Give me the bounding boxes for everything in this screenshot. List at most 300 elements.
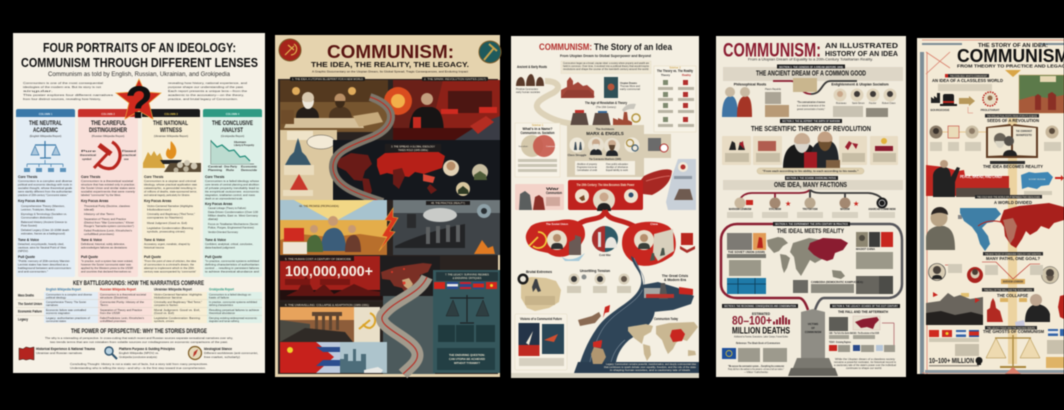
section 3: one idea, many factions: ★ <box>853 200 859 208</box>
panel: revolution scene <box>384 80 500 140</box>
legacy text band: Legacy: Communism remains powerful, transformative, and deeply controversial idea <box>606 363 697 366</box>
column 2: the careful distinguisher: Theoretical Purity (Doctrine, classless <box>84 204 131 208</box>
icon: red star with question mark <box>116 77 161 128</box>
column 2: the careful distinguisher: Pull Quote <box>81 255 98 259</box>
column 4: the conclusive analyst: Million deaths, East vs. West Germany <box>208 214 259 218</box>
panel: visions of a communist future <box>515 314 567 370</box>
section 6: fall and aftermath: 1991 - The Dissolution of the USSR <box>853 331 879 335</box>
column 4: the conclusive analyst: Core Thesis <box>205 175 225 179</box>
poster 5 title: FROM THEORY TO PRACTICE AND LEGACY <box>957 64 1064 68</box>
section: a world divided <box>926 195 1064 251</box>
arrow: lightning divider <box>379 208 398 251</box>
column 4: the conclusive analyst: Verdict-Oriented Summary <box>208 230 239 234</box>
icon: wheat, flame and skulls <box>143 141 201 172</box>
column 3: the national witness: symbols, prosecuting crimes) <box>147 230 185 234</box>
column 3: the national witness: Key Focus Areas <box>144 199 172 203</box>
column 3: the national witness: Legislative Condemnation (Banning <box>147 226 194 230</box>
column 2: the careful distinguisher: Failed Predictions (Lenin, Khrushchev's <box>84 228 133 232</box>
column 2: the careful distinguisher: Key Focus Areas <box>81 199 109 203</box>
column 2: the careful distinguisher: however the Soviet 'communist state' was <box>81 262 132 266</box>
column 4: the conclusive analyst: Police, Purges, Engineered Famines) <box>208 226 254 230</box>
panel: China red cloud <box>622 222 676 266</box>
key battlegrounds comparison table: Resulting perpetual failures to achieve <box>209 308 260 312</box>
Enlightenment portraits: Robert Owen <box>882 102 896 105</box>
poster 1 intro text <box>23 81 248 101</box>
column 1: the neutral academic: political and economic ideology with roots in <box>18 182 73 186</box>
section 1: ancient dream: SECTION 1: THE GENESIS OF A DREAM (BEFORE 1848) <box>779 65 843 69</box>
section labels: TAKES HOLD (1945-1980s) <box>398 149 428 152</box>
column 1: the neutral academic: Communism is a complex and diverse <box>18 179 73 183</box>
column 2: the careful distinguisher: unfulfilled promises) <box>84 232 114 236</box>
power of perspective section <box>19 329 258 370</box>
key battlegrounds comparison table: communist states <box>46 319 67 323</box>
column 3: the national witness: catastrophic, a genocidal resulting in <box>144 186 197 190</box>
poster 1: four portraits of an ideology <box>13 33 265 373</box>
section: the idea becomes reality: THE IDEA BECOMES REALITY <box>983 164 1043 169</box>
column 4: the conclusive analyst: Economic <box>241 164 258 168</box>
panel: the great crisis and modern era <box>642 274 694 312</box>
section 4: the ideal meets reality <box>721 222 902 310</box>
red swoosh flow <box>637 169 672 195</box>
intro text box <box>561 61 651 74</box>
section: an idea of a classless world <box>931 74 1064 113</box>
Cambodia block <box>793 280 864 293</box>
column 4: the conclusive analyst: defining characteristics of authoritarian <box>205 262 260 266</box>
flags row <box>929 329 1064 337</box>
column 2: the careful distinguisher: theoretical <box>80 153 96 157</box>
section: a world divided: THE COLD WAR: THE WORLD SPLIT BETWEEN TWO IDEOLOGIES <box>977 196 1040 199</box>
power of perspective section: THE POWER OF PERSPECTIVE: WHY THE STORIES DIVERGE <box>71 329 207 335</box>
key battlegrounds comparison table: unfulfilled promises <box>100 319 127 323</box>
section 3: one idea, many factions <box>723 176 903 218</box>
poster 3 title <box>539 42 673 58</box>
section: seeds of a revolution: MANIFESTO <box>1016 133 1032 137</box>
key battlegrounds comparison table: The Soviet Union <box>18 302 42 306</box>
poster 1 subtitle: Communism as told by English, Russian, Ukrainian, and Grokipedia <box>48 71 230 78</box>
column 3: the national witness: COLUMN 3 <box>164 112 178 116</box>
Enlightenment portraits: Saint-Simon <box>852 102 865 105</box>
column 3: the national witness: compares to Nazism) <box>147 216 183 220</box>
key battlegrounds comparison table: KEY BATTLEGROUNDS: HOW THE NARRATIVES COMPARE <box>73 281 204 287</box>
section 1: ancient dream: THE ANCIENT DREAM OF A COMMON GOOD <box>756 68 866 78</box>
icon: magnifying glass <box>105 347 117 359</box>
key battlegrounds comparison table: structure (Doctrine) <box>100 296 128 300</box>
section 5: death toll: MILLION DEATHS <box>732 326 790 336</box>
column 2: the careful distinguisher: Definitional, historical, subtly defensive, <box>81 242 125 246</box>
key battlegrounds comparison table: political ideology <box>46 296 67 300</box>
panel: the idea sepia scene <box>280 80 388 132</box>
column 1: the neutral academic: THE NEUTRAL <box>29 121 62 127</box>
key battlegrounds comparison table: Grokipedia Report <box>209 288 235 292</box>
section labels: 1. THE IDEA: A UTOPIAN BLUEPRINT FOR A NEW WORLD <box>292 78 363 81</box>
column 1: the neutral academic: (NPOV) <box>18 249 28 253</box>
column 3: the national witness: Accusatory, urgent, moralistic, shaped by <box>144 242 191 246</box>
power of perspective section: English Wikipedia (NPOV) vs. <box>119 351 159 355</box>
emblem: hammer and sickle <box>279 39 301 61</box>
column 2: the careful distinguisher: Pure <box>81 149 97 153</box>
section 4: the ideal meets reality: SECTION 4: THE EXPERIMENT: THE 20TH CENTURY IN PRACTICE <box>775 222 848 226</box>
column 1: the neutral academic: and anti-communism." <box>18 270 48 274</box>
column 4: the conclusive analyst: ANALYST <box>222 128 243 134</box>
panel: the architects Marx & Engels: Centralisation of credit <box>577 168 597 172</box>
poster 1 intro text: This poster explores four different narratives <box>23 93 114 97</box>
poster 1 intro text: from four distinct sources, revealing how history, <box>23 97 101 101</box>
arrow: red right <box>1055 175 1064 181</box>
column 3: the national witness: Communism is a utopian and criminal <box>144 179 196 183</box>
sidebar: the theory vs the reality: The Theory vs. The Reality <box>657 69 693 73</box>
key battlegrounds comparison table: Legacy: authoritarian practices of <box>46 316 90 320</box>
decorative frame <box>922 40 1064 374</box>
power of perspective section: Understanding who is telling the story—and why—is the first step toward true comprehension. <box>70 366 206 370</box>
column 4: the conclusive analyst: Confident, analytical, critical, conclusive, <box>205 242 253 246</box>
panel: Soviet Union red cloud <box>526 220 585 261</box>
illustration: medieval town and book: early communal <box>620 87 640 91</box>
key battlegrounds comparison table: basis of failure <box>209 296 230 300</box>
sidebar: the theory vs the reality: Theory <box>661 73 670 77</box>
column 4: the conclusive analyst: Focus on Totalitarian Mechanisms (Secret <box>208 222 258 226</box>
column 2: the careful distinguisher: Rouge's "barracks-system communism") <box>84 224 134 228</box>
icon: red book stack <box>680 233 695 253</box>
column 4: the conclusive analyst: "In practice, communist systems exhibited <box>205 259 260 263</box>
key battlegrounds comparison table: Separation of Theory and Practice <box>100 308 143 312</box>
power of perspective section: free-market, scholarly) <box>204 355 240 359</box>
column 2: the careful distinguisher: structure that has existed only in practice; <box>81 182 135 186</box>
poster 1 title <box>21 40 258 70</box>
column 2: the careful distinguisher: acknowledges failures as deviations <box>81 246 128 250</box>
key battlegrounds comparison table: Holodomor famine <box>154 296 183 300</box>
ancient and early roots <box>516 65 547 94</box>
sidebar: the theory vs the reality: Reality <box>682 73 691 77</box>
section: a world divided: A WORLD DIVIDED <box>994 200 1032 206</box>
column 2: the careful distinguisher: use <box>124 158 129 161</box>
column 1: the neutral academic: Pull Quote <box>18 255 35 259</box>
poster 4 title: AN ILLUSTRATED <box>825 41 899 50</box>
column 3: the national witness <box>142 109 201 277</box>
icon: red star with question mark: ? <box>125 77 153 128</box>
section 1: ancient dream: Enlightenment & Utopian Socialism <box>831 82 889 86</box>
panel: the unravelling collapse: 6. THE UNRAVELLING: COLLAPSE & ADAPTATION (1989-1991) <box>285 304 369 307</box>
poster 4: an illustrated history of an idea <box>716 36 906 377</box>
column 4: the conclusive analyst: core tenets of central planning and abolition <box>205 182 260 186</box>
column 3: the national witness: Pull Quote <box>144 255 161 259</box>
icon: declining line chart: Human <box>234 140 246 144</box>
column 3: the national witness: "From the point of view of criticism, the idea <box>144 259 197 263</box>
column 2: the careful distinguisher: Tone & Voice <box>81 238 102 242</box>
poster 1 intro text: singular. <box>23 89 54 93</box>
Enlightenment portraits <box>833 88 896 117</box>
panel: brutal extremes beige blob <box>518 270 561 311</box>
power of perspective section: The why is a misreading of perspective. In cross-cutting that watch recent and Russian sources separate sensational narratives over why, <box>45 336 233 340</box>
column 1: the neutral academic: Communalism distinction) <box>21 216 53 220</box>
panel: dark map of Asia <box>380 256 440 296</box>
section 5: death toll: Party did from the earliest to the present—crimes of all our nation." <box>728 367 784 371</box>
column 1: the neutral academic: Core Thesis <box>18 175 38 179</box>
section 5: death toll <box>722 304 798 374</box>
column 1: the neutral academic: Tone & Voice <box>18 238 39 242</box>
panel: the great crisis and modern era: The Great Crisis <box>662 274 688 278</box>
key battlegrounds comparison table: Communism is a theoretical societal <box>100 292 146 296</box>
column 2: the careful distinguisher: COLUMN 2 <box>101 112 115 116</box>
section 2: the scientific theory of revolution: SECTION 2: THE BLUEPRINT: THE BIRTH OF MARXISM <box>782 119 840 123</box>
column 4: the conclusive analyst: THE CONCLUSIVE <box>212 121 253 127</box>
panel: visions of a communist future: Visions of a Communist Future <box>520 317 562 321</box>
column 2: the careful distinguisher: THE CAREFUL <box>91 121 126 127</box>
panel: what's in a name: What's in a Name? <box>522 127 552 131</box>
road: beige idea path <box>537 81 585 126</box>
key battlegrounds comparison table: theoretical abundance <box>209 311 235 315</box>
column 4: the conclusive analyst: Communism is a failed ideology whose <box>205 179 260 183</box>
icon: compass <box>188 346 202 360</box>
section 3: one idea, many factions: ONE IDEA, MANY FACTIONS <box>774 180 847 189</box>
poster 3: the story of an idea <box>511 36 699 378</box>
column 3: the national witness: Criminality and Illegitimacy ("Red Terror," <box>147 212 195 216</box>
section 5: death toll: —Viktor Yushchenko <box>744 370 768 374</box>
panel: brutal extremes beige blob: Brutal Extremes <box>526 270 552 274</box>
key battlegrounds comparison table: Communist Purity: History of the <box>100 300 145 304</box>
column 4: the conclusive analyst: of private property inevitably lead to <box>205 186 260 190</box>
poster 4 title: HISTORY OF AN IDEA <box>825 49 899 58</box>
tan center strip <box>1008 118 1017 364</box>
quote pill <box>757 168 864 174</box>
section: many paths, one goal: MANY PATHS, ONE GOAL? <box>986 256 1040 262</box>
power of perspective section: Historical Experience & National Trauma <box>36 347 95 351</box>
age of revolution & theory <box>570 101 640 127</box>
monument: victims of communism: COMMUNISM <box>805 330 821 334</box>
column 2: the careful distinguisher: Communism is a theoretical societal <box>81 179 133 183</box>
blue map of Soviet Russia: SOVIET RUSSIA <box>1029 178 1046 181</box>
section: the collapse <box>926 288 1064 328</box>
panel: what's in a name: Communism vs. Socialism <box>520 131 554 135</box>
key battlegrounds comparison table: (Good vs. Evil) <box>154 311 174 315</box>
panel: the communist manifesto grey box <box>666 159 696 210</box>
column 1: the neutral academic: Post-Soviet) <box>21 224 37 228</box>
sidebar: the theory vs the reality <box>654 66 696 132</box>
section: an idea of a classless world: BOURGEOISIE <box>931 108 950 112</box>
ancient and early roots: Ancient & Early Roots <box>517 65 547 69</box>
panel: the promise propaganda: 4A. THE PROMISE (PROPAGANDA) <box>299 205 339 208</box>
column 4: the conclusive analyst: Democide <box>241 168 258 172</box>
column 4: the conclusive analyst: control ... resulting in persistent failures <box>205 266 260 270</box>
column 2: the careful distinguisher: socialist experiments that were merely <box>81 190 136 194</box>
key battlegrounds comparison table: narratives <box>46 303 59 307</box>
panel: the unravelling collapse <box>280 302 383 342</box>
panel: the architects Marx & Engels: Free public education <box>606 162 628 166</box>
column 2: the careful distinguisher: symbol <box>82 157 92 161</box>
key battlegrounds comparison table: Moral Judgment: Good vs. Evil, <box>154 308 200 312</box>
section: many paths, one goal: MARXISM-LENINISM <box>1003 280 1024 284</box>
Enlightenment portraits: Fourier <box>869 102 877 105</box>
panel: legacy teal section with flags and scales: CAN UTOPIA BE ACHIEVED <box>449 357 486 361</box>
key battlegrounds comparison table: Comprehensive Theory: The Soviet <box>46 300 86 304</box>
key battlegrounds comparison table: compares to Nazism <box>154 303 179 307</box>
column 4: the conclusive analyst: Data-Driven Condemnation (Over 100 <box>208 210 259 214</box>
age of revolution & theory: The Age of Revolution & Theory <box>585 101 627 105</box>
key battlegrounds comparison table: Communism is a complex and diverse <box>46 292 93 296</box>
section 2: the scientific theory of revolution <box>722 119 898 174</box>
photos: People's Republic of China: MAOIST CHINA <box>856 247 875 251</box>
column 1: the neutral academic: "Public memory of 20th-century Marxist- <box>18 259 70 263</box>
column 4: the conclusive analyst: to achieve theoretical abundance and <box>205 270 260 274</box>
column 3: the national witness: attempt to implement which in the 20th <box>144 266 195 270</box>
column 1: the neutral academic: Balanced History (Ancient Greece to <box>21 220 68 224</box>
key battlegrounds comparison table: English Wikipedia Report <box>46 288 82 292</box>
section 2: the scientific theory of revolution: THE SCIENTIFIC THEORY OF REVOLUTION <box>751 124 871 133</box>
panel: what's in a name: Communism <box>546 146 558 148</box>
column 3: the national witness: (Ukrainian Wikipedia Report) <box>154 134 188 138</box>
panel: new communism pink callout <box>515 184 564 210</box>
unsettling tension portraits <box>567 269 631 293</box>
revolution scene: PEACE, BREAD, AND LAND! <box>960 174 1002 179</box>
key battlegrounds comparison table: Criminality and Illegitimacy "Red Terror," <box>154 300 202 304</box>
poster 1 intro text: practice, and brutal legacy of Communism. <box>168 97 238 101</box>
column 3: the national witness: historical trauma <box>144 246 165 250</box>
legacy text band: in shaping human societies, and a cautionary tale of ideals <box>610 369 691 372</box>
section: the ghosts of communism <box>929 326 1064 368</box>
column 1: the neutral academic: Detached, encyclopedic, heavily cited, <box>18 242 64 246</box>
section 6: fall and aftermath: SECTION 6: THE LEGACY: ECHOES OF THE 21ST CENTURY <box>832 304 898 308</box>
column 3: the national witness: WITNESS <box>160 128 182 134</box>
column 1: the neutral academic: battleground between anti-communism <box>18 266 72 270</box>
monument: victims of communism: OF <box>811 326 815 330</box>
intro text box: revolutions and shape the course of the twentieth century around the world. <box>563 67 649 71</box>
poster 1 intro text: ideologies of the modern era. But its story is not <box>23 85 101 89</box>
column 2: the careful distinguisher: Flawed <box>122 149 137 153</box>
panel: China red cloud: China <box>650 222 658 226</box>
icon: skull <box>976 357 982 365</box>
panel: the architects Marx & Engels: The Architects <box>596 127 615 131</box>
poster 5 title: THE STORY OF AN IDEA: <box>978 43 1048 49</box>
column 3: the national witness: THE NATIONAL <box>153 121 188 127</box>
column 1: the neutral academic: cautious; aims for Neutral Point of View <box>18 246 66 250</box>
section 5: death toll: Attributed to Famine, Executions, Labor Camps, Forced Exiles <box>734 334 788 338</box>
panel: the architects Marx & Engels: Class Struggle <box>568 153 587 157</box>
column 4: the conclusive analyst: data) <box>208 217 218 221</box>
section 1: ancient dream: Plato's Republic <box>765 87 782 91</box>
poster 2 title <box>275 35 500 79</box>
ancient and early roots: Primitive Communism <box>516 87 539 91</box>
column 2: the careful distinguisher: (Russian Wikipedia Report) <box>92 134 124 138</box>
section: seeds of a revolution: THE COMMUNIST <box>1016 129 1032 133</box>
key battlegrounds comparison table: stagnation and human suffering <box>209 319 239 323</box>
column 2: the careful distinguisher: DISTINGUISHER <box>89 128 128 134</box>
key battlegrounds comparison table: symbols, crimes <box>154 319 175 323</box>
power of perspective section: Ukrainian and Russian narratives <box>36 351 83 355</box>
panel: top section bottom dark <box>278 78 498 374</box>
column 4: the conclusive analyst: Tone & Voice <box>205 238 226 242</box>
column 3: the national witness: Core Thesis <box>144 175 164 179</box>
poster 1 title: FOUR PORTRAITS OF AN IDEOLOGY: <box>43 40 236 55</box>
section labels: 3. THE SPREAD: A GLOBAL IDEOLOGY <box>391 146 435 148</box>
column 4: the conclusive analyst: Pull Quote <box>205 255 222 259</box>
poster 2: the idea, the reality, the legacy <box>275 35 501 377</box>
panel: new communism pink callout: Communism <box>546 191 562 195</box>
section 4: the ideal meets reality: THE IDEAL MEETS REALITY <box>777 228 845 235</box>
road: winding path lower <box>382 277 427 374</box>
section: seeds of a revolution: SEEDS OF A REVOLUTION <box>987 118 1039 124</box>
section: an idea of a classless world: AN IDEA OF A CLASSLESS WORLD <box>932 78 1003 84</box>
power of perspective section: two trends terms that are not mistaken from volatile sources our misdiagnoses on economic comparisons of the past. <box>50 340 228 344</box>
map: communism today <box>628 317 698 361</box>
panel: the great crisis and modern era: & Modern Era <box>664 278 686 282</box>
poster 4 title: COMMUNISM: <box>723 40 821 62</box>
poster 3 title: From Utopian Dream to Global Superpower and Beyond <box>560 54 651 58</box>
key battlegrounds comparison table <box>16 281 262 323</box>
column 1: the neutral academic <box>16 109 75 277</box>
illustration: medieval town and book: Thomas More and <box>620 84 640 88</box>
photos: People's Republic of China <box>856 232 893 294</box>
poster 1 intro text: academic to the accusatory—on the theory, <box>168 93 244 97</box>
section 3: one idea, many factions: STALINISM <box>769 208 781 211</box>
panel: the architects Marx & Engels: Progressive income tax <box>577 165 597 169</box>
figures: Marx and Engels <box>783 132 840 168</box>
column 4: the conclusive analyst: data-backed judgment <box>205 246 235 250</box>
icon: declining line chart: Liberty & Prosperity <box>234 143 254 147</box>
panel: the architects Marx & Engels: Abolition of inheritance <box>606 165 628 169</box>
section: many paths, one goal: THE MANY FACES OF COMMUNISM: IDEOLOGY AND VARIATION <box>985 253 1041 256</box>
section 6: fall and aftermath: While the Utopian dream of a classless society <box>835 357 896 361</box>
column 4: the conclusive analyst: stagnation, totalitarian control, and mass <box>205 193 256 197</box>
monument: victims of communism <box>788 309 838 376</box>
section: seeds of a revolution: THE INTELLECTUAL ROOTS: FROM UTOPIA TO SCIENCE <box>987 115 1037 118</box>
section 3: one idea, many factions: SECTION 3: THE SCHISM: DIVERGING PATHS <box>786 176 836 180</box>
column 2: the careful distinguisher: Separation of Theory and Practice <box>84 217 127 221</box>
panel: the architects Marx & Engels: Abolition of property <box>577 162 598 166</box>
Cambodia block: CAMBODIA (DEMOCRATIC KAMPUCHEA): <box>811 280 864 284</box>
intro text box: Communism began as a broad, utopian ideal: a society where property and wealth are <box>563 61 649 65</box>
column 2: the careful distinguisher: ideal) <box>84 208 94 212</box>
section 6: fall and aftermath: THE FALL AND THE AFTERMATH <box>838 310 888 314</box>
poster 1 intro text: purpose shape our understanding of the past. <box>168 85 244 89</box>
column 4: the conclusive analyst: Causal Linkage (Theory to Failure) <box>208 206 246 210</box>
ancient and early roots: early human societies <box>516 90 541 94</box>
section: an idea of a classless world: THE CORE IDEA: WHAT IS COMMUNISM? <box>950 75 988 78</box>
column 2: the careful distinguisher <box>78 109 138 277</box>
figures: Plato and Aristotle <box>722 87 752 117</box>
column 2: the careful distinguisher: and countries that declared themselves so <box>81 270 131 274</box>
power of perspective section: Ideological Stance <box>204 347 232 351</box>
column 2: the careful distinguisher: (Distinct from "War Communism," Khmer <box>84 220 134 224</box>
column 3: the national witness: Tone & Voice <box>144 238 165 242</box>
icon: cold war circle: Cold War <box>599 253 611 257</box>
section 3: one idea, many factions: MARXISM-LENINISM <box>729 208 751 211</box>
key battlegrounds comparison table: Victim-Centered Narrative: Highlights <box>154 292 203 296</box>
column 3: the national witness: of millions of deaths, state-sponsored terror, <box>144 190 197 194</box>
panel: what's in a name <box>515 123 560 177</box>
column 4: the conclusive analyst: Rule <box>226 168 235 172</box>
column 4: the conclusive analyst: One-Party <box>224 164 237 168</box>
legacy text band: that continues to spark debate over equality, freedom, and the role of the state <box>604 366 697 369</box>
panel: Soviet Union red cloud: The Soviet Union <box>546 222 568 226</box>
power of perspective section: Different worldviews (anti-communist, <box>204 351 258 355</box>
monument: victims of communism: VICTIMS <box>808 322 819 326</box>
section: the collapse: THE COLLAPSE <box>997 293 1029 299</box>
column 1: the neutral academic: Debated Legacy (Cites 10-100M death <box>21 228 70 232</box>
column 4: the conclusive analyst: death on an unprecedented scale. <box>205 196 243 200</box>
column 1: the neutral academic: Key Focus Areas <box>18 199 46 203</box>
section: the idea becomes reality <box>926 160 1064 197</box>
key battlegrounds comparison table: Economic failure was unrivalled <box>46 308 87 312</box>
column 3: the national witness: and national tragedy, particularly for Ukraine. <box>144 193 190 197</box>
column 4: the conclusive analyst: its empirical outcomes: economic <box>205 190 260 194</box>
poster 2 title: A Graphic Documentary on the Utopian Dream, Its Global Spread, Tragic Consequences, and Enduring Impact <box>312 70 468 74</box>
column 4: the conclusive analyst: (Grokipedia Report) <box>221 134 244 138</box>
power of perspective section: Grokipedia (conclusive analysis) <box>119 355 157 359</box>
column 1: the neutral academic: ACADEMIC <box>33 128 59 134</box>
key battlegrounds comparison table: Failed Predictions: Lenin, Khrushchev's <box>100 316 145 320</box>
unsettling tension portraits: Unsettling Tension <box>580 269 610 273</box>
poster 3 title: The Story of an Idea <box>594 42 673 53</box>
column 4: the conclusive analyst: COLUMN 4 <box>226 112 240 116</box>
